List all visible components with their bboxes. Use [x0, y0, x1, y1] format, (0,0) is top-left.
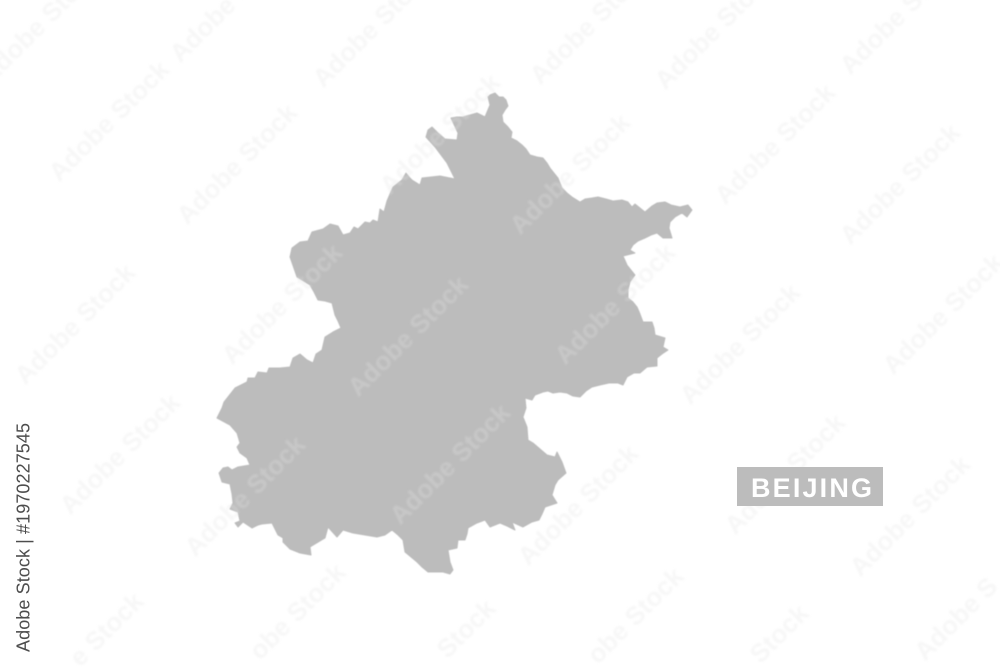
watermark: repeated Adobe Stock marks: Adobe Stock	[505, 108, 636, 240]
watermark: repeated Adobe Stock marks: Adobe Stock	[217, 238, 348, 370]
watermark: repeated Adobe Stock marks: Adobe Stock	[720, 408, 851, 540]
watermark: repeated Adobe Stock marks: Stock	[432, 594, 502, 664]
watermark: repeated Adobe Stock marks: Adobe Stock	[835, 118, 966, 250]
watermark: repeated Adobe Stock marks: obe Stock	[582, 562, 690, 667]
watermark: repeated Adobe Stock marks: Adobe Stock	[710, 78, 841, 210]
watermark: repeated Adobe Stock marks: Adobe Stock	[550, 238, 681, 370]
watermark: repeated Adobe Stock marks: Adobe Stock	[172, 98, 303, 230]
watermark: repeated Adobe Stock marks: Stock	[745, 599, 815, 667]
watermark: repeated Adobe Stock marks: Adobe Stock	[375, 68, 506, 200]
label: BEIJING: BEIJING	[751, 473, 872, 503]
watermark: repeated Adobe Stock marks: Adobe Stock	[343, 270, 474, 402]
watermark: repeated Adobe Stock marks: Adobe Stock	[180, 430, 311, 562]
stock image credit: Adobe Stock | #1970227545	[14, 423, 34, 652]
watermark: repeated Adobe Stock marks: Adobe Stock	[675, 278, 806, 410]
watermark: repeated Adobe Stock marks: Adobe Stock	[10, 258, 141, 390]
watermark: repeated Adobe Stock marks: Adobe Stock	[44, 55, 175, 187]
watermark: repeated Adobe Stock marks: Adobe Stock	[513, 439, 644, 571]
watermark: repeated Adobe Stock marks: Adobe Stock	[385, 398, 516, 530]
watermark: repeated Adobe Stock marks: obe Stock	[244, 558, 352, 665]
label: BEIJING	[737, 467, 883, 506]
map: Beijing silhouette	[217, 93, 692, 574]
watermark: repeated Adobe Stock marks: Adobe Stock	[55, 388, 186, 520]
watermark: repeated Adobe Stock marks: Adobe Stock	[845, 450, 976, 582]
